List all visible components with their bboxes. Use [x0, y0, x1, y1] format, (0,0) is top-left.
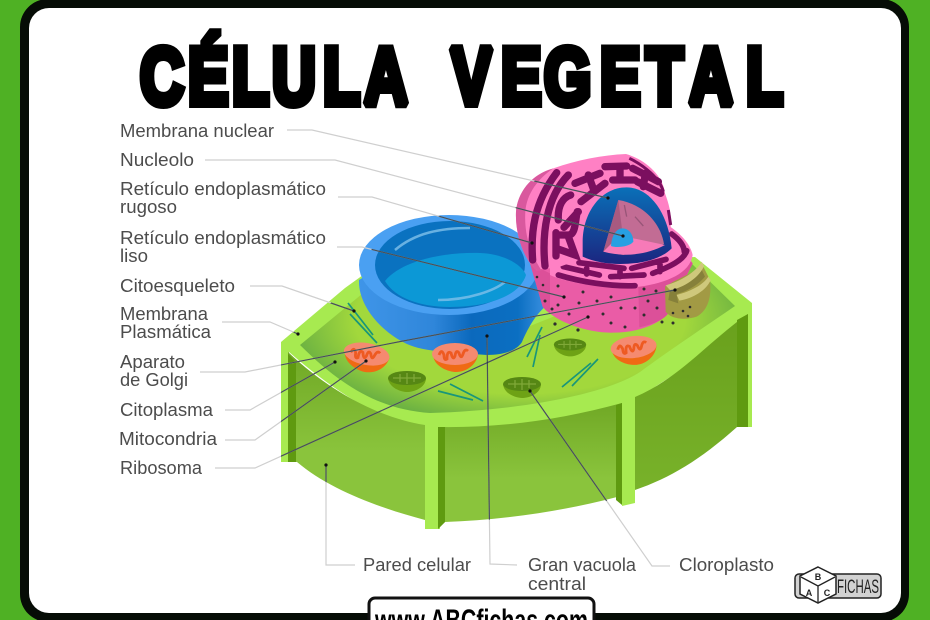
ER disc — [550, 227, 693, 288]
label: Membrana Plasmática: Plasmática — [120, 322, 212, 342]
chloroplasts — [388, 338, 586, 398]
label: Ribosoma: Ribosoma — [120, 458, 203, 478]
leader lines: outside cell — [200, 130, 675, 566]
logo plate — [795, 574, 881, 598]
highlights — [395, 228, 505, 300]
label: Citoplasma: Citoplasma — [120, 400, 214, 420]
label: Citoesqueleto: Citoesqueleto — [120, 276, 235, 296]
label: Retículo endoplasmático rugoso: rugoso — [120, 197, 177, 217]
logo cube — [800, 567, 836, 603]
label: Aparato de Golgi: Aparato — [120, 352, 185, 372]
cytoskeleton filaments — [348, 303, 598, 401]
mitochondria — [341, 334, 658, 376]
label: Pared celular: Pared celular — [363, 555, 471, 575]
ER dome — [516, 154, 671, 271]
vacuole rim — [359, 215, 539, 315]
label: Retículo endoplasmático liso: liso — [120, 246, 148, 266]
label: Mitocondria: Mitocondria — [119, 429, 218, 449]
label: Retículo endoplasmático liso: Retículo endoplasmático — [120, 228, 326, 248]
leader end dots — [296, 196, 677, 467]
nucleus interior: floor — [603, 238, 665, 255]
ER dome shaded band — [516, 168, 553, 271]
ER dome tubes — [532, 166, 661, 266]
central vacuole — [359, 215, 546, 355]
vacuole water — [385, 253, 526, 307]
logo cube: A — [806, 588, 813, 598]
cell floor: cytoplasm — [300, 262, 735, 413]
label: Cloroplasto: Cloroplasto — [679, 555, 774, 575]
golgi apparatus — [665, 262, 711, 319]
vacuole inner — [375, 221, 525, 309]
logo: ABC fichas — [795, 567, 881, 603]
wall light posts — [425, 303, 752, 529]
label: Membrana nuclear: Membrana nuclear — [120, 121, 274, 141]
cell wall: rim and top face — [281, 257, 752, 529]
labels — [119, 121, 774, 594]
nucleolus — [611, 228, 633, 247]
ribosomes — [536, 276, 691, 332]
label: Membrana Plasmática: Membrana — [120, 304, 209, 324]
vacuole body — [359, 225, 546, 355]
label: Nucleolo: Nucleolo — [120, 150, 194, 170]
ER rim tube — [629, 158, 671, 225]
wall panel: right — [635, 314, 748, 490]
nucleus and endoplasmic reticulum — [516, 154, 711, 333]
nucleus envelope — [583, 187, 672, 264]
label: Gran vacuola central: Gran vacuola — [528, 555, 637, 575]
website tab — [369, 598, 594, 620]
wall panel: middle — [438, 403, 622, 529]
label: Retículo endoplasmático rugoso: Retículo endoplasmático — [120, 179, 326, 199]
logo cube: C — [824, 588, 831, 598]
title: CÉLULA VEGETAL — [140, 32, 783, 122]
diagram: plant cell — [281, 154, 752, 529]
label: Gran vacuola central: central — [528, 574, 586, 594]
logo cube: B — [815, 572, 822, 582]
label: Aparato de Golgi: de Golgi — [120, 370, 188, 390]
nucleus interior: side wall — [603, 200, 623, 252]
logo wordmark: FICHAS — [837, 577, 879, 598]
wall shaded edges — [288, 314, 748, 529]
nucleus strands — [624, 205, 643, 226]
ER disc tubes — [558, 234, 687, 286]
nucleus interior: back wall — [603, 200, 664, 255]
leader lines: over cell — [281, 180, 674, 520]
pink lower body — [530, 223, 693, 333]
wall panel: left — [288, 352, 425, 520]
